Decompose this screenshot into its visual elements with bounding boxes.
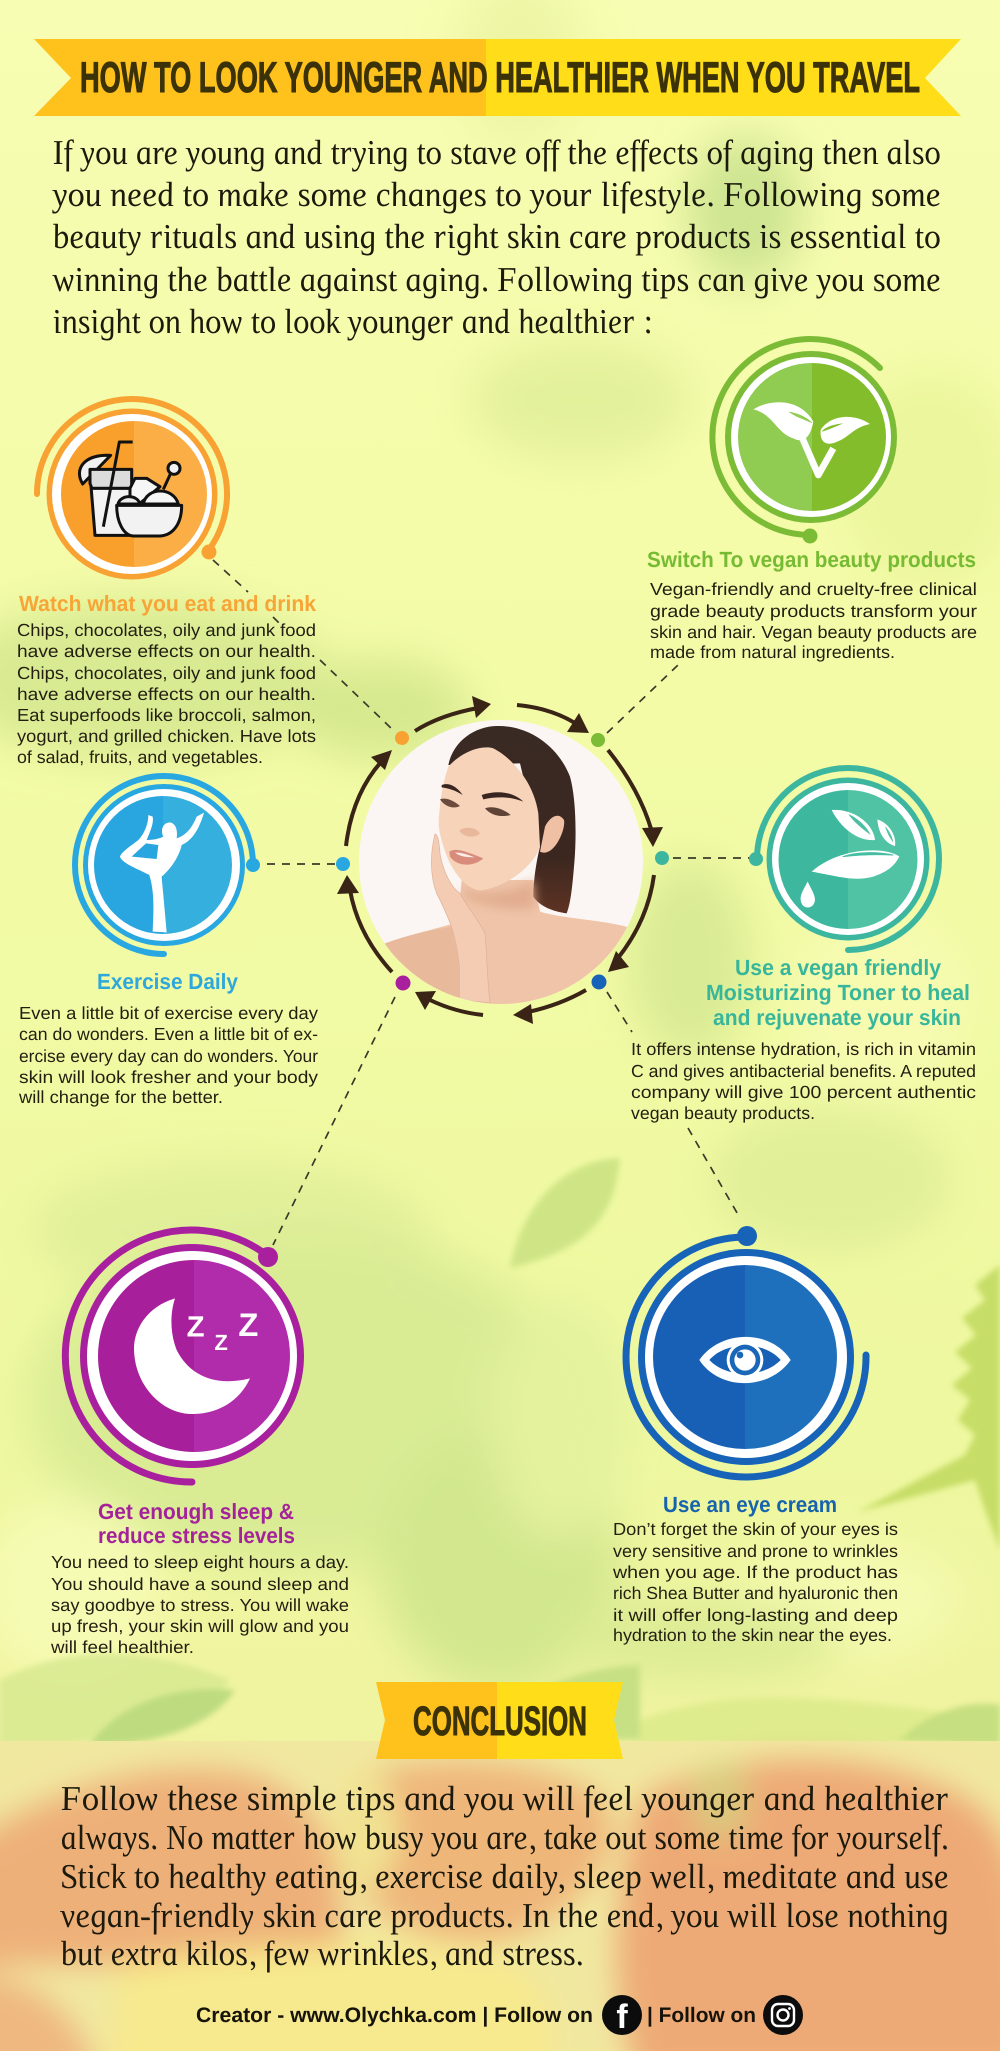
body text [50,1552,349,1657]
intro text: If you are young and trying to stave off the effects of aging then also [48,133,943,172]
panel: eye cream [612,1226,898,1645]
icon: moon badge [65,1230,304,1482]
body text [612,1519,898,1645]
heading: and rejuvenate your skin [713,1005,961,1030]
body text: You need to sleep eight hours a day. [51,1552,349,1572]
body text: yogurt, and grilled chicken. Have lots [17,726,316,746]
body text: vegan beauty products. [631,1103,815,1123]
body text: skin and hair. Vegan beauty products are [650,622,977,642]
body text [650,579,977,662]
body text: have adverse effects on our health. [17,641,316,661]
panel: sleep and stress [50,1230,349,1657]
conclusion text: vegan-friendly skin care products. In the end, you will lose nothing [57,1896,951,1935]
intro text [46,133,943,341]
footer [196,1995,803,2036]
panel: watch what you eat and drink [17,399,317,767]
heading: Exercise Daily [97,969,239,994]
icon: eye badge [626,1226,866,1477]
conclusion banner [376,1682,623,1759]
body text: can do wonders. Even a little bit of ex- [19,1024,318,1044]
icon: vegan leaf badge [712,339,897,544]
icon: moon badge: Z [187,1310,205,1343]
icon: yoga badge [75,776,260,954]
panel: switch to vegan beauty products [647,339,977,662]
connector lines [213,560,752,1245]
body text: will feel healthier. [50,1637,194,1657]
body text: will change for the better. [18,1087,223,1107]
heading [98,1499,295,1548]
cycle dots [336,731,669,990]
intro text: you need to make some changes to your lifestyle. Following some [46,175,943,214]
body text [631,1039,976,1123]
body text: skin will look fresher and your body [19,1067,318,1087]
icon: leaf and drop badge [749,768,939,950]
body text [18,1003,318,1107]
panel: exercise daily [18,776,318,1107]
body text: Don’t forget the skin of your eyes is [613,1519,898,1539]
icon: instagram [763,1995,803,2035]
body text: ercise every day can do wonders. Your [19,1046,318,1066]
body text: Chips, chocolates, oily and junk food [17,663,316,683]
body text: rich Shea Butter and hyaluronic then [613,1583,898,1603]
body text: up fresh, your skin will glow and you [51,1616,349,1636]
intro text: beauty rituals and using the right skin care products is essential to [49,217,943,256]
body text: Even a little bit of exercise every day [19,1003,318,1023]
body text: it will offer long-lasting and deep [613,1605,898,1625]
panel: moisturizing toner [631,768,976,1123]
icon: facebook [602,1995,642,2036]
body text [17,620,316,767]
body text: Chips, chocolates, oily and junk food [17,620,316,640]
intro text: winning the battle against aging. Following tips can give you some [49,260,943,299]
heading: Moisturizing Toner to heal [706,980,970,1005]
body text: of salad, fruits, and vegetables. [17,747,263,767]
icon: moon badge: Z [214,1330,228,1355]
body text: when you age. If the product has [612,1562,898,1582]
conclusion heading: CONCLUSION [413,1698,587,1744]
conclusion text: Stick to healthy eating, exercise daily, sleep well, meditate and use [57,1857,951,1896]
body text: Eat superfoods like broccoli, salmon, [17,705,316,725]
body text: Vegan-friendly and cruelty-free clinical [650,579,977,599]
heading [706,955,970,1030]
body text: It offers intense hydration, is rich in vitamin [631,1039,976,1059]
body text: say goodbye to stress. You will wake [51,1595,349,1615]
conclusion backdrop: strawberries [0,1741,1000,2051]
icon: moon badge: Z [238,1306,258,1343]
body text: C and gives antibacterial benefits. A reputed [631,1061,976,1081]
conclusion text: Follow these simple tips and you will feel younger and healthier [56,1779,952,1818]
heading: Use an eye cream [663,1492,837,1517]
body text: grade beauty products transform your [650,601,977,621]
conclusion text [56,1779,952,1973]
icon: food and drink badge [37,399,227,580]
body text: company will give 100 percent authentic [631,1082,976,1102]
heading: Watch what you eat and drink [19,591,317,616]
intro text: insight on how to look younger and healthier : [49,302,656,341]
heading: Switch To vegan beauty products [647,547,976,572]
center portrait [359,720,643,1013]
body text: made from natural ingredients. [650,642,895,662]
body text: very sensitive and prone to wrinkles [613,1541,898,1561]
footer: | Follow on [647,2004,756,2027]
heading: Use a vegan friendly [735,955,942,980]
heading: reduce stress levels [98,1523,295,1548]
footer: Creator - www.Olychka.com | Follow on [196,2004,593,2027]
body text: You should have a sound sleep and [51,1574,349,1594]
heading: Get enough sleep & [98,1499,294,1524]
body text: hydration to the skin near the eyes. [613,1625,892,1645]
title banner [34,39,961,116]
icon: facebook: f [616,1998,628,2036]
conclusion text: but extra kilos, few wrinkles, and stress. [57,1934,586,1973]
body text: have adverse effects on our health. [17,684,316,704]
cycle arrows [337,696,663,1024]
